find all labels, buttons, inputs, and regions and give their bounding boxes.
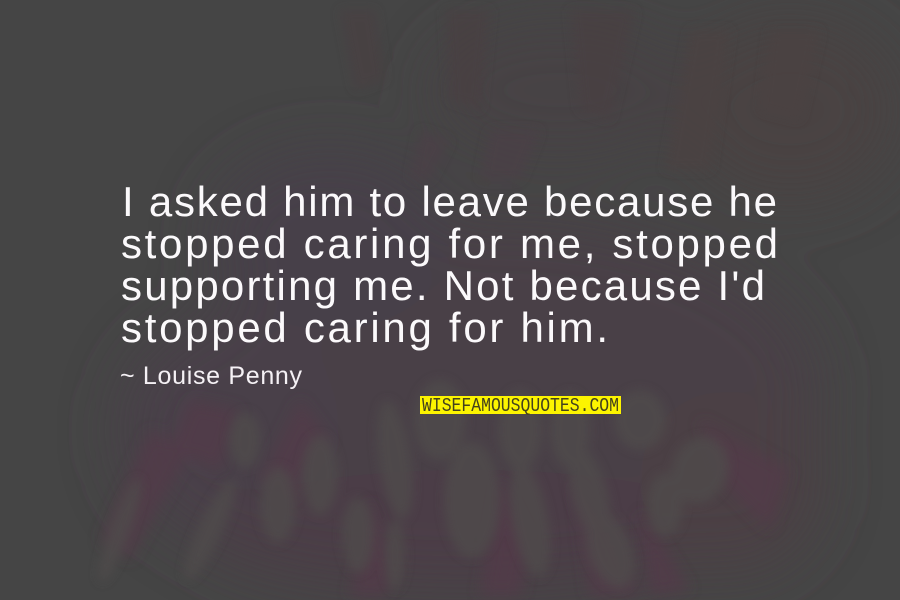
author attribution: ~ Louise Penny — [120, 362, 302, 390]
quote line 2: stopped caring for me, stopped — [121, 220, 778, 267]
quote line 1: I asked him to leave because he — [122, 178, 777, 225]
watermark badge: WISEFAMOUSQUOTES.COM — [422, 395, 619, 417]
quote line 4: stopped caring for him. — [121, 304, 608, 351]
flower petals, dark pink shadows — [130, 446, 675, 588]
background: muted flower photo — [107, 384, 788, 596]
flower petals, upper streaks — [340, 10, 820, 180]
quote line 3: supporting me. Not because I'd — [121, 262, 765, 309]
quote text — [121, 178, 778, 351]
flower petals, pale grey tips — [107, 388, 726, 586]
